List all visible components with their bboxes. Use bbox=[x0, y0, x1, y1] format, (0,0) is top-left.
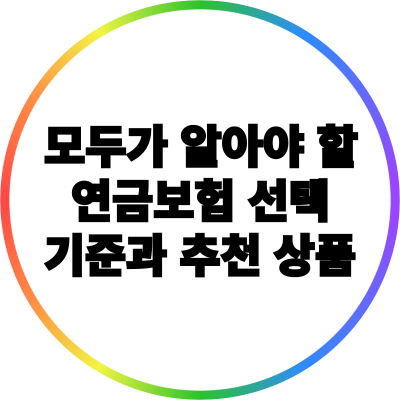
title line 1: 모두가 알아야 할 bbox=[44, 124, 358, 172]
title line 2: 연금보험 선택 bbox=[71, 178, 330, 227]
title line 3: 기준과 추천 상품 bbox=[44, 232, 356, 282]
